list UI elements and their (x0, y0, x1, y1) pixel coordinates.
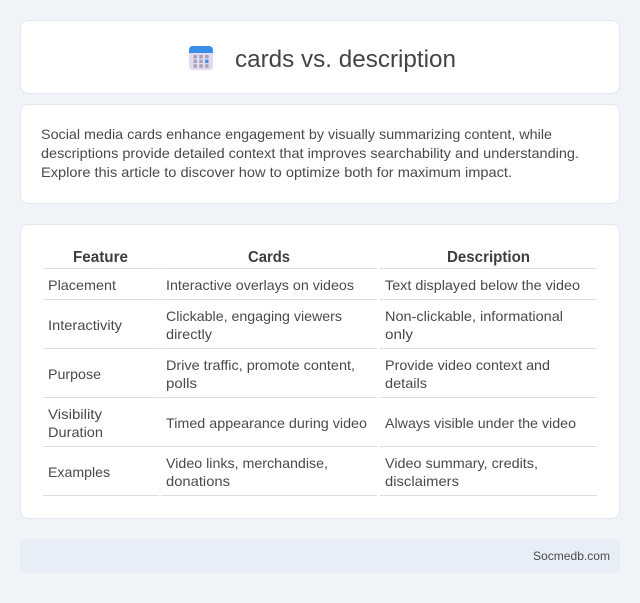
paragraph text: Social media cards enhance engagement by visually summarizing content, while (41, 126, 552, 142)
title text: cards vs. description (235, 46, 456, 73)
row: interactivity: Interactivity (48, 317, 122, 333)
row: placement: Placement (48, 277, 116, 293)
row: visibility duration: Always visible under the video (385, 415, 576, 431)
footer source text: Socmedb.com (533, 549, 610, 563)
row: placement (48, 277, 580, 293)
row: interactivity: only (385, 326, 413, 342)
row: visibility duration: Visibility (48, 406, 102, 422)
row: interactivity: Clickable, engaging viewers (166, 308, 342, 324)
row: purpose: Provide video context and (385, 357, 550, 373)
row: examples: disclaimers (385, 473, 459, 489)
panel: comparison table (20, 224, 620, 518)
footer (20, 539, 620, 573)
row: visibility duration (48, 406, 576, 440)
table header: Cards (248, 249, 290, 266)
row: purpose (48, 357, 550, 391)
row: visibility duration: Duration (48, 424, 103, 440)
row: examples (48, 455, 538, 489)
paragraph text: Explore this article to discover how to optimize both for maximum impact. (41, 164, 512, 180)
row: examples: donations (166, 473, 230, 489)
table header: Description (447, 249, 530, 266)
row: visibility duration: Timed appearance during video (166, 415, 367, 431)
panel: intro paragraph (20, 104, 620, 204)
icon: calendar (189, 46, 213, 70)
paragraph text: descriptions provide detailed context that improves searchability and understanding. (41, 145, 579, 161)
row: purpose: polls (166, 375, 197, 391)
row: placement: Text displayed below the video (385, 277, 580, 293)
row: purpose: Drive traffic, promote content, (166, 357, 355, 373)
row: purpose: details (385, 375, 427, 391)
row: examples: Examples (48, 464, 110, 480)
table header: Feature (73, 249, 128, 266)
row: interactivity (48, 308, 563, 342)
row: interactivity: Non-clickable, informational (385, 308, 563, 324)
table header (73, 249, 530, 266)
row: interactivity: directly (166, 326, 212, 342)
row: purpose: Purpose (48, 366, 101, 382)
row: examples: Video summary, credits, (385, 455, 538, 471)
row: placement: Interactive overlays on videos (166, 277, 354, 293)
panel: title (20, 20, 620, 94)
row: examples: Video links, merchandise, (166, 455, 328, 471)
paragraph text (41, 126, 579, 180)
